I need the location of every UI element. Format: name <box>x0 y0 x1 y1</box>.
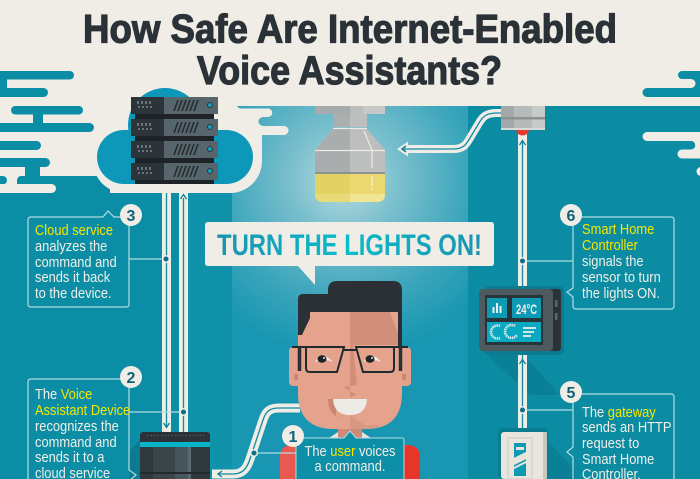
ears <box>289 347 411 386</box>
tube between gateway and sensor <box>518 133 527 433</box>
icon: smart home controller <box>479 286 564 355</box>
callout 5 text: The gateway <box>582 403 656 420</box>
callout 1 text <box>305 442 395 474</box>
glasses <box>292 347 408 372</box>
badge 6: 6 <box>567 208 576 225</box>
icon: light bulb <box>315 106 385 202</box>
cloud stripes left <box>0 71 110 196</box>
face <box>298 312 402 429</box>
callout 1 text: a command. <box>315 457 385 474</box>
title <box>83 8 617 93</box>
badge 1: 1 <box>289 429 298 446</box>
arrow: sensor to bulb <box>397 113 502 156</box>
icon: server rack <box>131 97 218 184</box>
mouth <box>328 399 367 419</box>
callout 2 text: sends it to a <box>35 448 105 465</box>
callout 6 text: signals the <box>582 252 644 269</box>
node 1 <box>251 450 257 456</box>
tubes between cloud and voice device <box>162 184 188 433</box>
badge 2: 2 <box>127 370 136 387</box>
node 5 <box>519 407 526 413</box>
badge 5: 5 <box>567 385 576 402</box>
callout 3 text: to the device. <box>35 284 112 301</box>
callout 3 text: analyzes the <box>35 237 108 254</box>
callout 1 text: The user voices <box>305 442 395 459</box>
callout 5 text <box>582 403 671 479</box>
callout 5 text: Smart Home <box>582 450 655 467</box>
icon: smart home controller: 24°C <box>516 301 537 317</box>
eyes <box>315 355 381 363</box>
user character <box>280 281 420 479</box>
badge 1 <box>282 425 304 447</box>
callout 2 text: recognizes the <box>35 417 119 434</box>
callout 2: voice assistant device <box>28 366 187 479</box>
tube from user to voice device <box>212 408 300 477</box>
cloud stripes right <box>468 71 700 479</box>
hair <box>298 281 402 346</box>
badge 2 <box>120 366 142 388</box>
callout 3 text: command and <box>35 253 117 270</box>
speech bubble: TURN THE LIGHTS ON! <box>217 229 482 262</box>
callout 6 text: Smart Home <box>582 220 655 237</box>
callout 2 text <box>35 385 130 479</box>
badge 6 <box>560 204 582 226</box>
long shadows of controller and gateway <box>483 351 575 479</box>
callout 5 text: request to <box>582 434 639 451</box>
node 6 <box>519 258 526 264</box>
callout 5 text: sends an HTTP <box>582 418 671 435</box>
callout 5: gateway <box>519 381 674 479</box>
node 3 <box>163 256 169 262</box>
icon: light sensor <box>501 106 545 136</box>
node 2 <box>180 409 187 415</box>
callout 1: the user <box>251 425 404 479</box>
callout 6 text: sensor to turn <box>582 268 661 285</box>
callout 6: smart home controller <box>519 204 674 309</box>
callout 2 text: command and <box>35 433 117 450</box>
cream cut-outs at top of lit panel <box>200 100 472 193</box>
callout 6 text: Controller <box>582 236 638 253</box>
title: How Safe Are Internet-Enabled <box>83 8 617 52</box>
title: Voice Assistants? <box>197 49 502 93</box>
badge 3 <box>120 204 142 226</box>
badge 3: 3 <box>127 208 136 225</box>
callout 3: cloud service <box>28 204 169 307</box>
callout 3 text <box>35 221 117 301</box>
callout 2 text: The Voice <box>35 385 92 402</box>
callout 2 text: Assistant Device <box>35 401 130 418</box>
badge 5 <box>560 381 582 403</box>
callout 6 text: the lights ON. <box>582 284 660 301</box>
callout 3 text: sends it back <box>35 268 110 285</box>
callout 6 text <box>582 220 661 301</box>
cloud <box>93 88 253 193</box>
callout 3 text: Cloud service <box>35 221 113 238</box>
collar <box>329 432 371 438</box>
icon: gateway <box>498 428 548 479</box>
icon: voice assistant device <box>129 432 210 479</box>
shirt <box>280 445 420 479</box>
speech bubble <box>205 222 494 285</box>
